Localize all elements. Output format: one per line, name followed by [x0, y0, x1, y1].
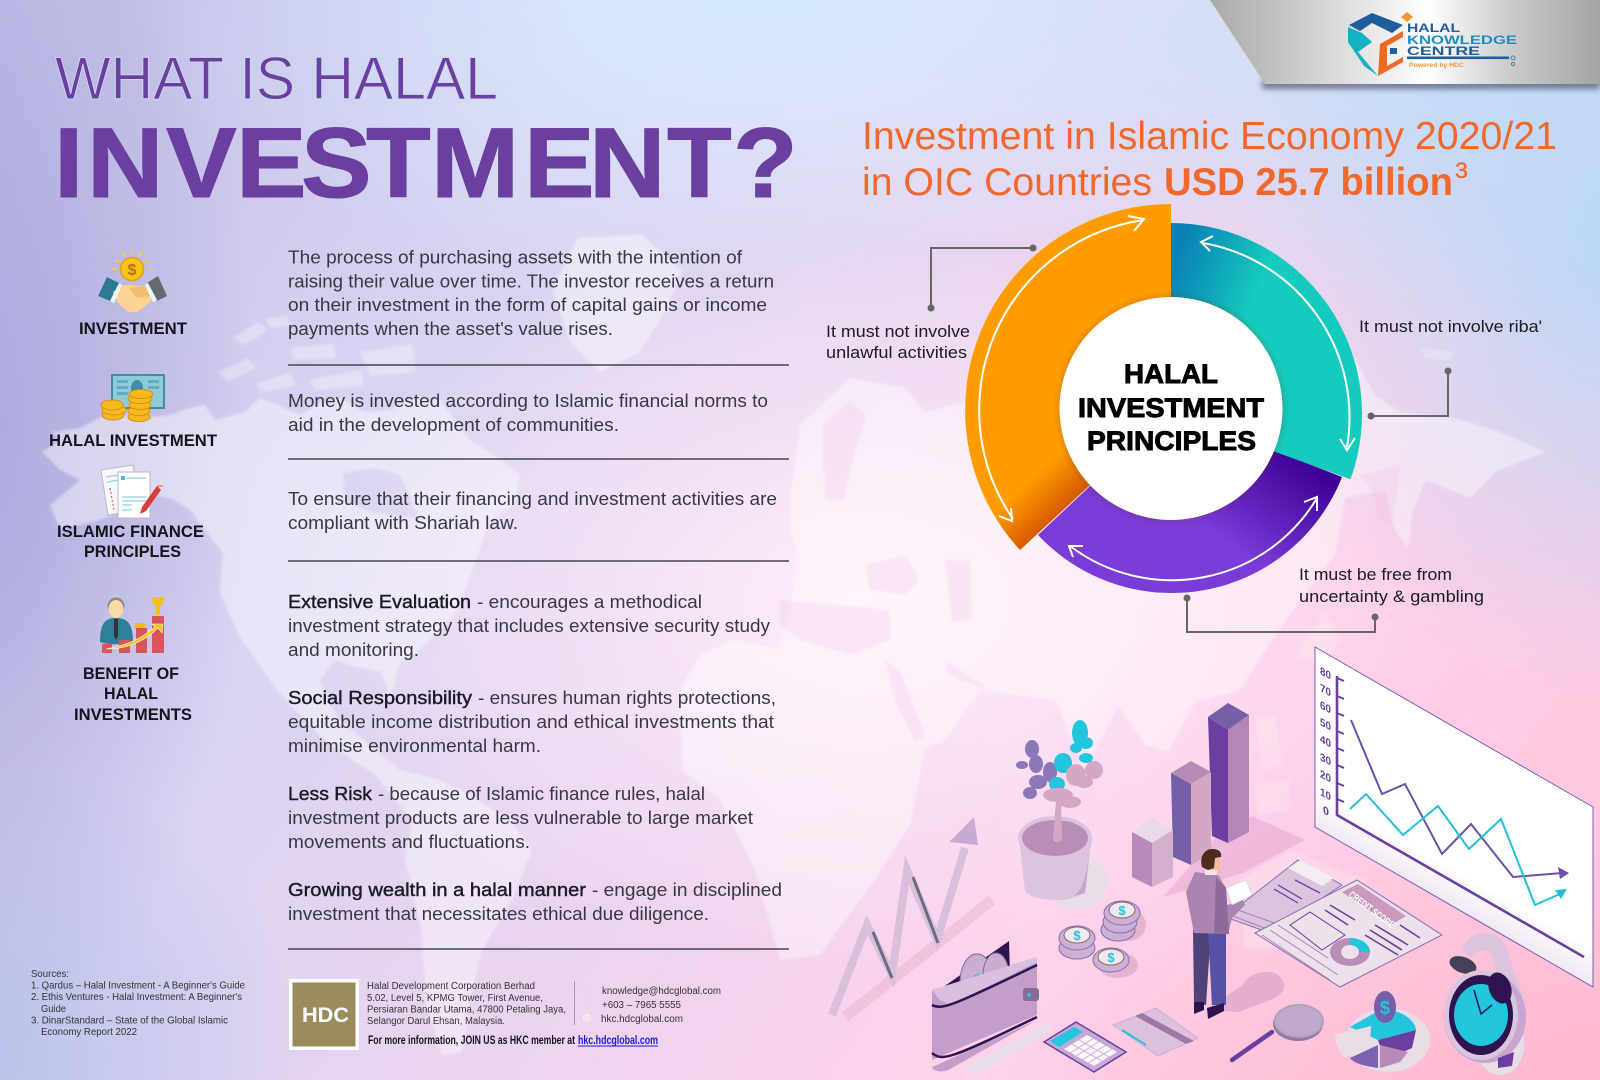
- center label: PRINCIPLES: [1087, 426, 1256, 456]
- icon: handshake and coin: $: [128, 262, 137, 279]
- contact details: [582, 986, 721, 1025]
- wallet: [932, 941, 1052, 1076]
- bar: short: [1132, 818, 1173, 887]
- calculator: [1044, 1022, 1126, 1072]
- icon: banknotes and coin stacks: [101, 375, 164, 422]
- heading: investment in Islamic economy: USD 25.7 billion: [1164, 161, 1453, 204]
- plant in pot: [1016, 720, 1107, 909]
- center label: INVESTMENT: [1078, 393, 1265, 423]
- text: less risk: - because of Islamic finance rules, halal: [378, 783, 705, 804]
- logo plate: Halal Knowledge Centre: [1210, 0, 1600, 89]
- label: benefit of halal investments: INVESTMENTS: [74, 705, 192, 724]
- segment: uncertainty and gambling: [1038, 410, 1342, 593]
- text: investment definition: The process of purchasing assets with the intention of: [288, 246, 743, 268]
- bar: tall: [1208, 703, 1249, 843]
- text: extensive evaluation: Extensive Evaluation: [288, 591, 471, 612]
- person reading tablet: [1186, 849, 1284, 1019]
- text: Islamic finance principles definition: compliant with Shariah law.: [288, 512, 518, 533]
- center label: HALAL: [1124, 359, 1218, 389]
- left column: term labels and icons: [49, 250, 218, 724]
- newspaper: right sheet: CREDIT SCORE: [1346, 890, 1396, 931]
- arrow: teal ring: [1201, 236, 1355, 450]
- callout: unlawful activities: [826, 322, 970, 362]
- text: less risk: [288, 783, 753, 852]
- heading: investment in Islamic economy: 3: [1455, 158, 1468, 183]
- footer: HDC contact block: [289, 979, 721, 1050]
- newspaper: right sheet: [1255, 880, 1442, 987]
- text: extensive evaluation: [288, 591, 771, 660]
- pie chart with coin: [1335, 991, 1430, 1072]
- newspaper: left sheet: [1225, 860, 1342, 933]
- label: Islamic finance principles: [57, 522, 204, 561]
- text: investment definition: raising their value over time. The investor receives a return: [288, 270, 774, 292]
- donut chart: halal investment principles: [965, 204, 1362, 593]
- illustration: isometric finance scene: [832, 647, 1593, 1076]
- world map backdrop: [42, 235, 1545, 1056]
- coin stacks: $: [1118, 903, 1126, 918]
- HDC logo: HDC: [302, 1004, 349, 1027]
- callout: uncertainty and gambling: uncertainty & gambling: [1299, 587, 1484, 606]
- text: social responsibility: [288, 687, 776, 756]
- sources: Sources:: [31, 969, 69, 980]
- text: Islamic finance principles definition: To ensure that their financing and investment activities are: [288, 488, 777, 509]
- text: growing wealth: [288, 879, 782, 924]
- contact details: knowledge@hdcglobal.com: [602, 986, 721, 997]
- line chart board: 50: [1320, 716, 1331, 734]
- connector: unlawful activities: [928, 244, 1036, 312]
- line chart board: [1315, 647, 1593, 987]
- title: INVESTMENT?: [54, 107, 798, 218]
- text: investment definition: [288, 246, 774, 339]
- logo wordmark: HALAL: [1407, 23, 1460, 35]
- icon: businessman with rising bars: [100, 597, 164, 653]
- label: benefit of halal investments: [74, 664, 192, 724]
- bar shadow: [1163, 816, 1305, 897]
- logo wordmark: CENTRE: [1407, 46, 1481, 58]
- contact details: +603 – 7965 5555: [602, 1000, 681, 1011]
- text: extensive evaluation: investment strategy that includes extensive security study: [288, 615, 771, 636]
- label: Islamic finance principles: PRINCIPLES: [84, 542, 181, 561]
- segment: riba: [1171, 223, 1362, 479]
- coin stacks: $: [1073, 928, 1081, 943]
- label: benefit of halal investments: BENEFIT OF: [83, 664, 179, 683]
- label: halal investment: HALAL INVESTMENT: [49, 431, 218, 450]
- line chart board: 0: [1323, 804, 1329, 819]
- text: less risk: investment products are less vulnerable to large market: [288, 807, 753, 828]
- pie chart with coin: $: [1380, 998, 1390, 1018]
- text: social responsibility: Social Responsibility: [288, 687, 473, 708]
- line chart board: 40: [1320, 733, 1331, 751]
- center label: [1078, 359, 1265, 456]
- segment: unlawful activities: [965, 204, 1171, 550]
- coin stacks: $: [1107, 950, 1115, 965]
- address: 5.02, Level 5, KPMG Tower, First Avenue,: [367, 993, 543, 1004]
- coin stacks: [1059, 901, 1146, 978]
- logo wordmark: [1407, 23, 1517, 69]
- text: growing wealth: investment that necessitates ethical due diligence.: [288, 903, 709, 924]
- line chart board: 60: [1320, 699, 1331, 717]
- text: growing wealth: - engage in disciplined: [592, 879, 782, 900]
- alarm clock: [1444, 933, 1526, 1075]
- label: investment: INVESTMENT: [79, 319, 188, 338]
- arrow: orange ring: [979, 216, 1144, 521]
- heading: investment in Islamic economy: [862, 115, 1557, 204]
- sources: Economy Report 2022: [41, 1027, 137, 1038]
- line chart board: 20: [1320, 768, 1331, 786]
- sources: 1. Qardus – Halal Investment - A Beginner's Guide: [31, 980, 245, 992]
- logo wordmark: KNOWLEDGE: [1407, 35, 1517, 47]
- text: halal investment definition: aid in the development of communities.: [288, 414, 619, 435]
- line chart board: 30: [1320, 751, 1331, 769]
- text: extensive evaluation: and monitoring.: [288, 639, 419, 660]
- logo cube icon: [1348, 12, 1413, 76]
- sources: Guide: [41, 1004, 66, 1015]
- text: investment definition: on their investment in the form of capital gains or income: [288, 294, 767, 315]
- label: Islamic finance principles: ISLAMIC FINANCE: [57, 522, 204, 541]
- sources: 2. Ethis Ventures - Halal Investment: A Beginner's: [31, 992, 242, 1003]
- text: less risk: Less Risk: [288, 783, 373, 804]
- address: Halal Development Corporation Berhad: [367, 981, 535, 992]
- text: growing wealth: Growing wealth in a halal manner: [288, 879, 586, 900]
- connector: uncertainty: [1184, 594, 1378, 632]
- label: benefit of halal investments: HALAL: [104, 684, 158, 703]
- sources: 3. DinarStandard – State of the Global Islamic: [31, 1016, 228, 1026]
- bank card: [1113, 1008, 1198, 1056]
- callout: riba: It must not involve riba': [1359, 317, 1542, 336]
- text: social responsibility: minimise environmental harm.: [288, 735, 541, 756]
- address: Selangor Darul Ehsan, Malaysia.: [367, 1016, 505, 1027]
- title: [54, 45, 798, 218]
- title: WHAT IS HALAL: [55, 45, 498, 112]
- icon: handshake and coin: [98, 250, 167, 312]
- text panel: definitions and benefits: [288, 246, 789, 949]
- membership call to action: hkc.hdcglobal.com: [578, 1033, 658, 1047]
- callout: unlawful activities: unlawful activities: [826, 343, 967, 362]
- HDC logo: [289, 979, 359, 1050]
- heading: investment in Islamic economy: in OIC Countries: [862, 161, 1152, 204]
- text: halal investment definition: Money is invested according to Islamic financial norms to: [288, 390, 768, 411]
- center circle: [1060, 297, 1282, 520]
- line chart board: 10: [1320, 786, 1331, 804]
- logo wordmark: Powered by HDC: [1409, 62, 1464, 69]
- heading: investment in Islamic economy: Investment in Islamic Economy 2020/21: [862, 115, 1557, 158]
- icon: documents and pen: [101, 465, 163, 518]
- text: less risk: movements and fluctuations.: [288, 831, 530, 852]
- bar: medium: [1171, 761, 1211, 865]
- callout: unlawful activities: It must not involve: [826, 322, 970, 341]
- line chart board: 70: [1320, 682, 1331, 700]
- magnifying glass: [1232, 1005, 1323, 1060]
- callout: uncertainty and gambling: [1299, 565, 1484, 606]
- text: halal investment definition: [288, 390, 768, 435]
- connector: riba: [1368, 368, 1452, 420]
- text: extensive evaluation: - encourages a methodical: [477, 591, 702, 612]
- contact details: hkc.hdcglobal.com: [601, 1014, 683, 1025]
- address: [367, 981, 566, 1027]
- zigzag up arrow: [832, 817, 992, 1017]
- text: Islamic finance principles definition: [288, 488, 777, 533]
- text: investment definition: payments when the asset's value rises.: [288, 318, 613, 339]
- text: social responsibility: - ensures human rights protections,: [478, 687, 776, 708]
- sources: [31, 969, 245, 1038]
- address: Persiaran Bandar Utama, 47800 Petaling Jaya,: [367, 1004, 566, 1016]
- text: social responsibility: equitable income distribution and ethical investments that: [288, 711, 774, 732]
- membership call to action: For more information, JOIN US as HKC member at: [368, 1033, 575, 1047]
- arrow: purple ring: [1069, 497, 1317, 580]
- line chart board: 80: [1320, 665, 1331, 683]
- wallet: $: [972, 970, 984, 995]
- callout: uncertainty and gambling: It must be free from: [1299, 565, 1452, 584]
